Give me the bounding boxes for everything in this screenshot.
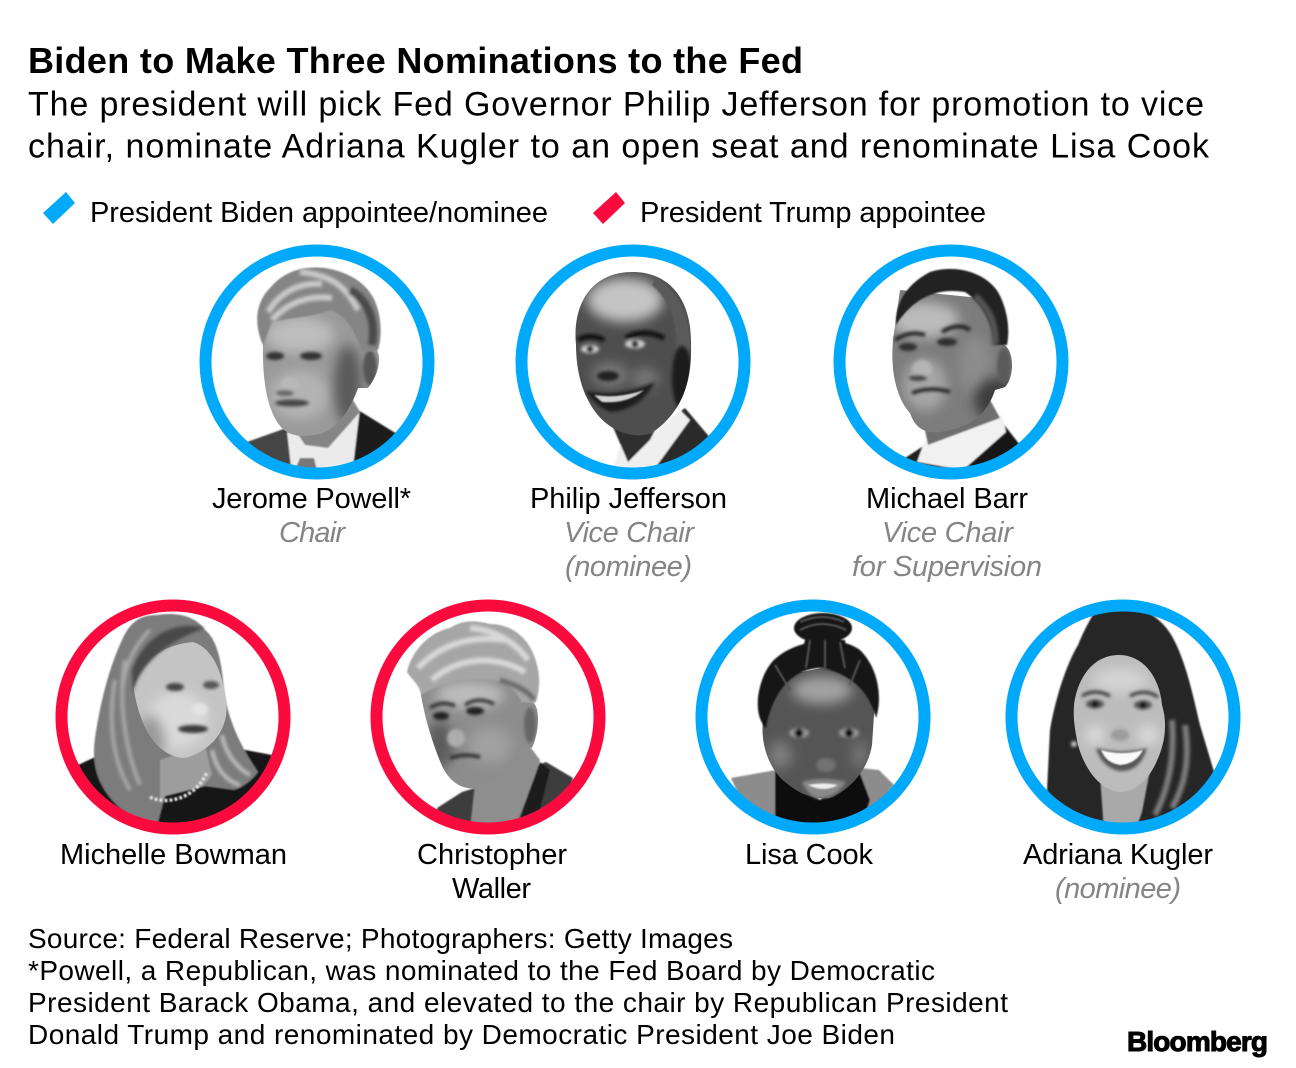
- label: Christopher Waller: Christopher: [417, 839, 567, 871]
- label: Adriana Kugler: Adriana Kugler: [1023, 839, 1213, 871]
- source and footnote: President Barack Obama, and elevated to the chair by Republican President: [28, 987, 1008, 1018]
- portrait: Michael Barr: [840, 250, 1062, 475]
- label: Philip Jefferson: (nominee): [565, 551, 692, 583]
- label: Michael Barr: Vice Chair: [882, 517, 1014, 549]
- label: Jerome Powell: [212, 483, 411, 549]
- portrait: Lisa Cook: [702, 606, 924, 832]
- label: Jerome Powell: Jerome Powell*: [212, 483, 411, 515]
- label: Adriana Kugler: (nominee): [1055, 873, 1181, 905]
- label: Christopher Waller: [417, 839, 567, 905]
- label: Michael Barr: for Supervision: [852, 551, 1042, 583]
- source and footnote: [28, 923, 1008, 1050]
- subtitle: [28, 86, 1210, 166]
- legend label: Biden: President Biden appointee/nominee: [90, 197, 548, 229]
- source and footnote: Source: Federal Reserve; Photographers: Getty Images: [28, 923, 733, 954]
- label: Jerome Powell: Chair: [279, 517, 346, 549]
- subtitle: The president will pick Fed Governor Philip Jefferson for promotion to vice: [28, 86, 1204, 124]
- label: Christopher Waller: Waller: [452, 873, 531, 905]
- legend: [43, 192, 986, 229]
- label: Philip Jefferson: [530, 483, 727, 583]
- subtitle: chair, nominate Adriana Kugler to an open seat and renominate Lisa Cook: [28, 128, 1210, 166]
- label: Michael Barr: [852, 483, 1042, 583]
- legend label: Trump: President Trump appointee: [640, 197, 986, 229]
- portrait: Jerome Powell: [206, 250, 428, 475]
- portrait: Michelle Bowman: [62, 606, 284, 830]
- source and footnote: Donald Trump and renominated by Democratic President Joe Biden: [28, 1019, 895, 1050]
- icon: red legend marker: [593, 192, 625, 224]
- label: Lisa Cook: Lisa Cook: [745, 839, 874, 871]
- portrait: Philip Jefferson: [522, 250, 744, 475]
- title: Biden to Make Three Nominations to the Fed: [28, 40, 803, 81]
- label: Michelle Bowman: Michelle Bowman: [60, 839, 287, 871]
- portrait: Adriana Kugler: [1012, 606, 1234, 832]
- Bloomberg logo: Bloomberg: [1127, 1026, 1268, 1057]
- label: Philip Jefferson: Vice Chair: [564, 517, 695, 549]
- label: Michael Barr: Michael Barr: [866, 483, 1028, 515]
- portrait: Christopher Waller: [376, 606, 600, 830]
- source and footnote: *Powell, a Republican, was nominated to the Fed Board by Democratic: [28, 955, 935, 986]
- label: Philip Jefferson: Philip Jefferson: [530, 483, 727, 515]
- icon: blue legend marker: [43, 192, 75, 224]
- label: Adriana Kugler: [1023, 839, 1213, 905]
